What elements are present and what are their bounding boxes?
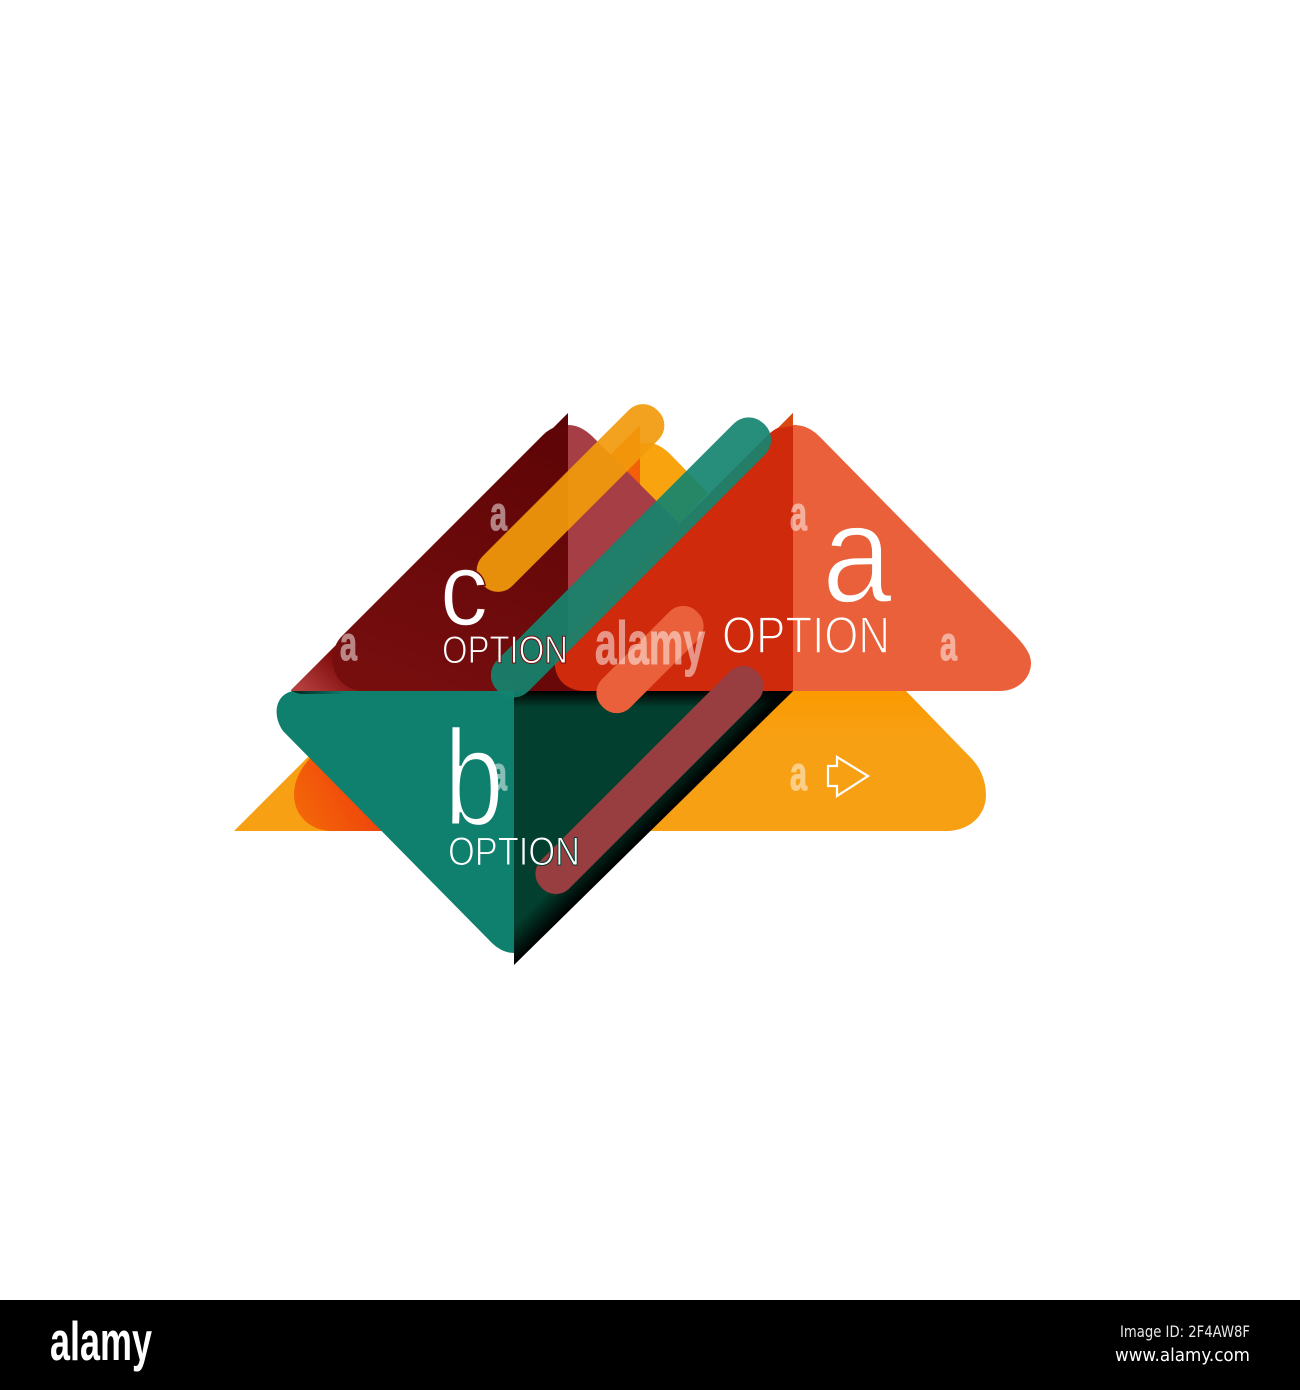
letter c: c [440, 532, 488, 648]
dark right half [514, 691, 793, 965]
letter a: a [822, 475, 892, 632]
watermark letters: a [790, 748, 807, 801]
letter b: b [444, 702, 504, 855]
teal triangle b [277, 691, 793, 965]
red sharp left half [516, 413, 793, 691]
orange bar [468, 396, 673, 600]
watermark letters [340, 488, 957, 801]
option a text: OPTION [722, 607, 890, 665]
watermark letters: a [790, 488, 807, 541]
footer bar [0, 1300, 1300, 1390]
lower orange triangle [234, 691, 986, 831]
maroon sharp left half [291, 413, 568, 691]
option a label [722, 475, 892, 665]
watermark letters: a [490, 748, 507, 801]
teal bar [482, 409, 780, 706]
red-orange triangle a [516, 413, 1031, 691]
option c text: OPTION [442, 629, 568, 672]
watermark letters: a [940, 618, 957, 671]
watermark wordmark: alamy [595, 610, 705, 677]
option c label [440, 532, 568, 672]
footer logo: alamy [50, 1310, 152, 1372]
maroon bar [528, 658, 771, 902]
option b label [444, 702, 580, 874]
coral right half [793, 425, 1031, 691]
upper orange triangle behind bars [563, 425, 708, 523]
maroon triangle c [291, 413, 720, 691]
top shadow on dark half [514, 691, 793, 707]
red-orange rounded corner [294, 756, 400, 831]
red rounded left half [555, 425, 793, 691]
watermark letters: a [340, 618, 357, 671]
watermark letters: a [490, 488, 507, 541]
icon: outlined arrow [828, 757, 868, 796]
maroon light right half [568, 425, 720, 691]
website: www.alamy.com [1115, 1345, 1250, 1366]
maroon rounded inner [333, 425, 568, 691]
option b text: OPTION [448, 830, 580, 874]
coral bar [588, 598, 712, 721]
teal left half [277, 691, 514, 953]
dark orange left half [563, 425, 640, 523]
top-left shadow [291, 691, 345, 694]
orange tip [778, 413, 793, 428]
image id: Image ID: 2F4AW8F [1120, 1322, 1250, 1341]
